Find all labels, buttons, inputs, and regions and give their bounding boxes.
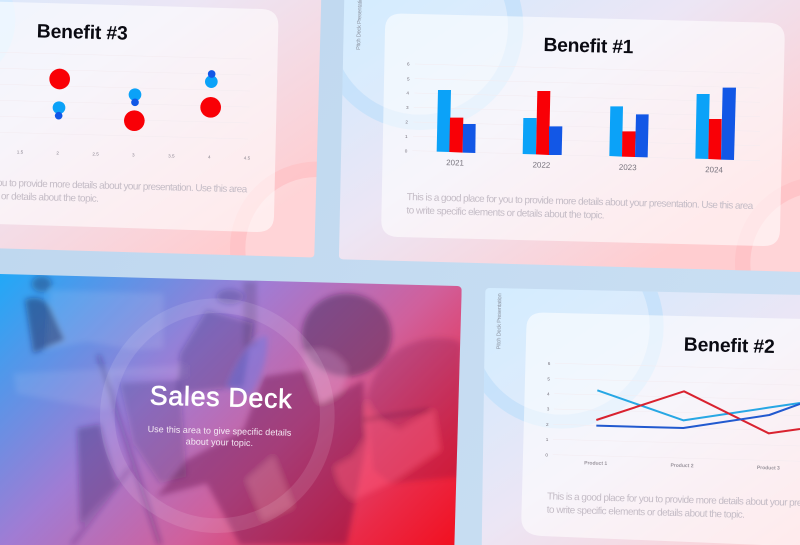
y axis labels: 3 [406, 105, 409, 110]
subtitle [148, 424, 292, 448]
panel: Benefit #3 slide [0, 0, 322, 258]
card: Benefit #2 content [521, 313, 800, 545]
body text: to write specific elements or details about the topic. [547, 505, 745, 521]
y axis labels: 4 [547, 391, 550, 396]
heading: Benefit #3: Benefit #3 [37, 21, 128, 45]
x axis year labels [446, 158, 724, 175]
x axis year labels: 2023 [619, 163, 637, 172]
y axis labels: 6 [548, 361, 551, 366]
y axis labels: 5 [547, 376, 550, 381]
decorative ring [107, 306, 327, 526]
panel: Benefit #1 slide [339, 0, 800, 272]
y axis labels [405, 62, 410, 153]
x axis year labels: 2024 [705, 165, 724, 175]
chart x axis labels: 2 [56, 150, 59, 155]
panel: Sales Deck title slide [0, 270, 465, 545]
subtitle: about your topic. [186, 436, 253, 448]
x axis product labels: Product 2 [670, 463, 694, 469]
chart x axis labels: 3 [132, 152, 135, 157]
y axis labels: 2 [405, 120, 408, 125]
subtitle: Use this area to give specific details [148, 424, 292, 438]
chart x axis labels: 1.5 [17, 149, 24, 154]
scatter chart [49, 69, 221, 131]
y axis labels: 0 [545, 452, 548, 457]
y axis labels: 0 [405, 148, 408, 153]
photo: two people working at computers [13, 276, 462, 545]
side label: Pitch Deck Presentation [496, 293, 503, 349]
y axis labels: 1 [546, 437, 549, 442]
line chart [596, 390, 800, 433]
body text [547, 491, 800, 521]
chart x axis labels: 2.5 [92, 151, 99, 156]
panel: Benefit #2 slide [482, 288, 800, 545]
x axis product labels: Product 3 [757, 465, 780, 472]
y axis labels: 5 [407, 76, 410, 81]
body text: This is a good place for you to provide more details about your presentation. Use this area [407, 192, 754, 212]
heading: Benefit #2: Benefit #2 [684, 335, 775, 358]
body text [0, 175, 248, 205]
y axis labels: 3 [547, 407, 550, 412]
chart x axis labels: 4.5 [244, 155, 251, 160]
heading: Benefit #1: Benefit #1 [543, 35, 634, 58]
chart x axis labels [17, 149, 251, 160]
chart x axis labels: 4 [208, 154, 211, 159]
card: Benefit #3 content [0, 2, 278, 232]
bar chart [437, 88, 736, 160]
x axis product labels: Product 1 [584, 460, 607, 467]
body text [406, 192, 754, 222]
x axis year labels: 2022 [532, 160, 551, 170]
y axis labels [545, 361, 551, 457]
y axis labels: 2 [546, 422, 549, 427]
title: Sales Deck: Sales Deck [150, 380, 293, 414]
x axis year labels: 2021 [446, 158, 465, 168]
chart x axis labels: 3.5 [168, 153, 175, 158]
y axis labels: 6 [407, 62, 410, 67]
y axis labels: 4 [406, 91, 409, 96]
body text: to write specific elements or details about the topic. [406, 205, 605, 222]
x axis product labels [584, 460, 780, 472]
card: Benefit #1 content [381, 14, 785, 246]
y axis labels: 1 [405, 134, 408, 139]
